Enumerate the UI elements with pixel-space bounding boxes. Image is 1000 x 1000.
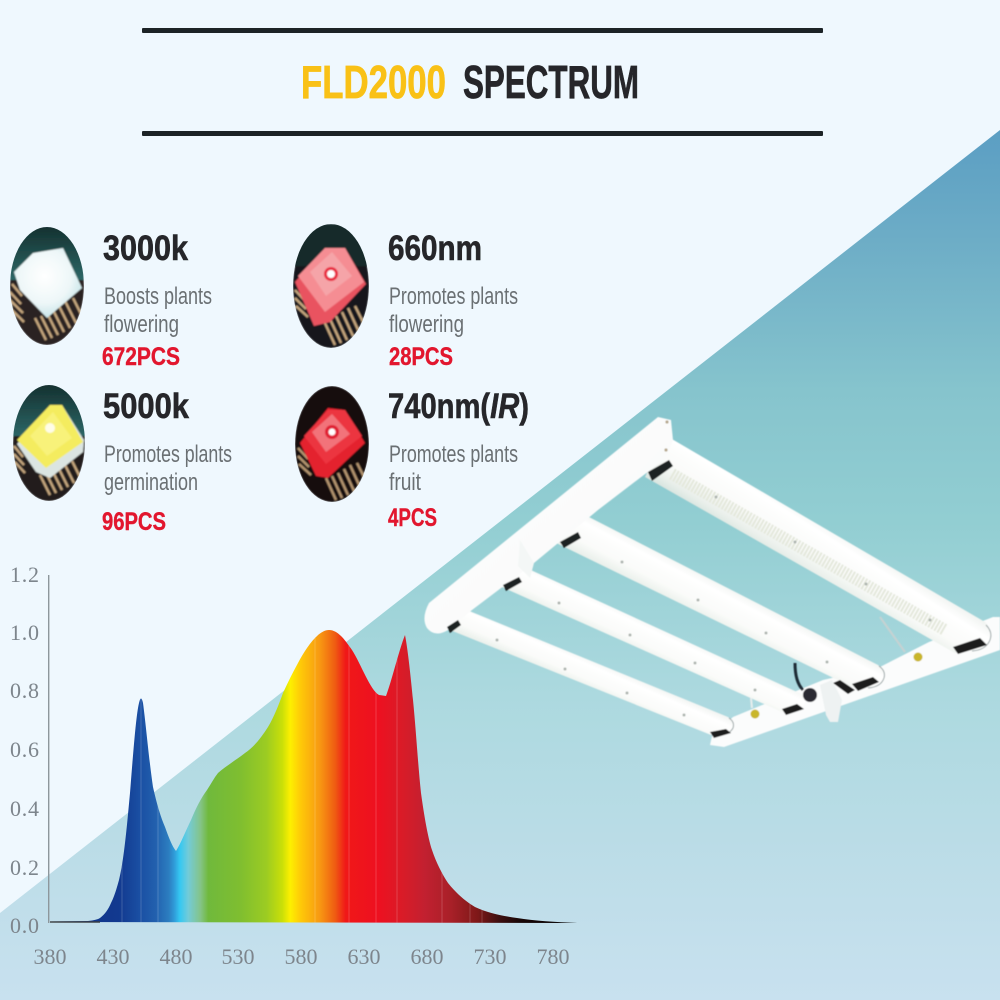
item: 5000k: [10, 384, 232, 536]
spectrum chart: [10, 562, 580, 969]
description: Promotes plants: [389, 283, 518, 310]
end clip: [953, 638, 987, 654]
fasteners: [714, 496, 932, 622]
y axis labels: 0.8: [10, 678, 39, 703]
power cable: [795, 663, 803, 690]
x axis labels: 380: [34, 944, 66, 969]
end clip: [782, 704, 804, 715]
crossbar hinge: [518, 540, 534, 578]
description: [104, 441, 232, 496]
description: flowering: [389, 311, 464, 338]
x axis labels: 580: [284, 944, 318, 969]
end arc: [720, 718, 734, 735]
y axis labels: 0.6: [10, 737, 39, 762]
count: 672PCS: [102, 343, 180, 371]
y axis labels: 1.0: [10, 620, 39, 645]
end arc: [868, 666, 884, 688]
heading: 5000k: [103, 387, 189, 426]
heading: 660nm: [388, 229, 482, 268]
count: 28PCS: [389, 343, 453, 371]
count: 96PCS: [102, 508, 166, 536]
fasteners: [496, 638, 686, 716]
description: [389, 283, 518, 338]
bottom rule: [142, 131, 823, 136]
description: germination: [104, 469, 198, 496]
item: 740nm: [295, 386, 529, 532]
connector: [803, 688, 817, 702]
description: [389, 441, 518, 496]
heading: 740nm(IR): [388, 387, 529, 426]
x axis labels: 730: [474, 944, 506, 969]
light bar 4: [440, 608, 734, 738]
y axis labels: [10, 562, 39, 938]
x axis labels: 530: [222, 944, 254, 969]
baseline left: [50, 921, 100, 923]
description: flowering: [104, 311, 179, 338]
light bar 2: [550, 515, 884, 694]
description: Promotes plants: [104, 441, 232, 468]
fasteners: [558, 602, 756, 692]
icon: white LED chip 3000k: [10, 226, 84, 345]
x axis labels: 630: [348, 944, 380, 969]
x axis labels: 430: [96, 944, 130, 969]
x axis labels: [34, 944, 570, 969]
hanger hook 2: [750, 698, 760, 718]
title: [301, 56, 639, 108]
spectrum curve: [50, 620, 580, 925]
description: Boosts plants: [104, 283, 212, 310]
light bar 3: [495, 566, 808, 715]
x axis labels: 680: [410, 944, 444, 969]
item: 3000k: [10, 226, 212, 371]
y axis line: [48, 575, 49, 923]
count: 4PCS: [388, 504, 437, 532]
x axis labels: 480: [160, 944, 192, 969]
rear rail: [710, 617, 1000, 747]
light bar 1: [645, 435, 991, 654]
end arc: [972, 625, 991, 651]
description: fruit: [389, 469, 421, 496]
icon: yellow LED chip 5000k: [10, 384, 88, 501]
icon: deep red LED chip 740nm: [295, 386, 369, 502]
fasteners: [620, 560, 828, 664]
y axis labels: 0.0: [10, 913, 39, 938]
title: FLD2000: [301, 56, 446, 108]
end clip: [710, 729, 731, 738]
front clips: [447, 460, 673, 633]
top rule: [142, 28, 823, 33]
LED strip: [672, 474, 945, 630]
y axis labels: 1.2: [10, 562, 39, 587]
icon: red LED chip 660nm: [293, 224, 370, 348]
LED grow light fixture: [424, 417, 1000, 747]
end clips: [852, 677, 879, 691]
y axis labels: 0.4: [10, 796, 39, 821]
y axis labels: 0.2: [10, 855, 39, 880]
description: Promotes plants: [389, 441, 518, 468]
rail bracket: [820, 680, 842, 722]
item: 660nm: [293, 224, 518, 371]
heading: 3000k: [103, 229, 188, 268]
hanger hook 1: [880, 617, 922, 662]
crossbar bolts: [664, 420, 669, 452]
main crossbar: [424, 417, 673, 634]
description: [104, 283, 212, 338]
title: SPECTRUM: [463, 56, 639, 108]
x axis labels: 780: [536, 944, 570, 969]
